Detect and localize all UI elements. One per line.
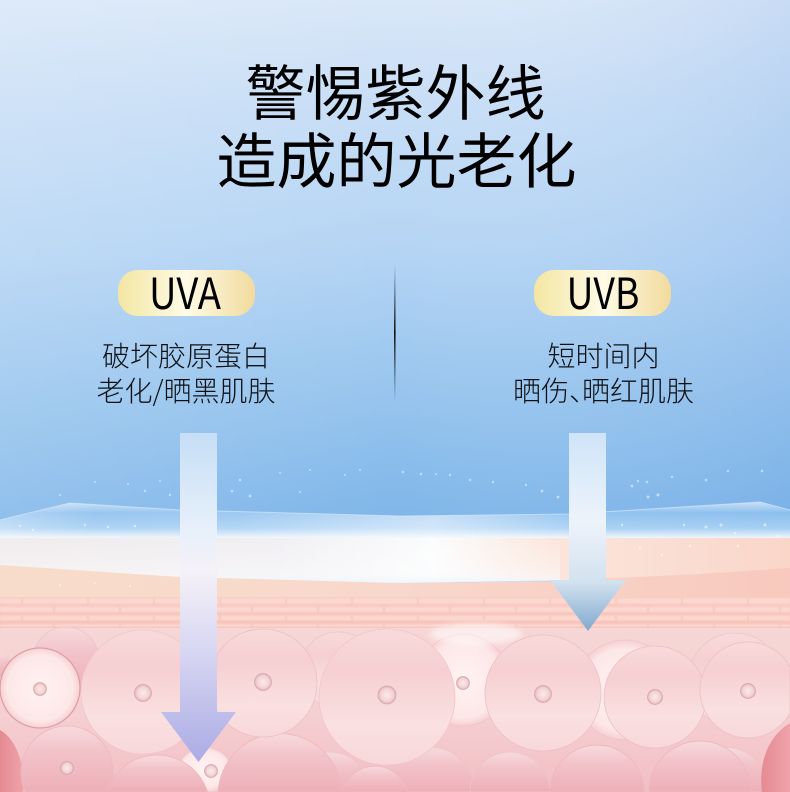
dark red cells at the edges [0,653,790,792]
pink base layer behind the cells [0,622,790,792]
arrow: UVA deep penetration [161,433,236,762]
UVB pill label [534,260,671,322]
UVA description: 破坏胶原蛋白 [102,335,270,375]
title: 造成的光老化 [216,114,576,201]
UVB description: 晒伤、晒红肌肤 [513,370,694,410]
title [216,46,576,201]
front row of skin cells with nuclei [0,629,790,778]
divider [394,264,396,402]
title: 警惕紫外线 [246,46,546,133]
UVB pill label: UVB [566,260,640,322]
skin layer: translucent blue film [0,502,790,538]
UVA pill label: UVA [149,260,221,322]
arrow: UVB shallow penetration [550,433,626,631]
sparkles in the sky [59,469,763,498]
skin layer: brick cells [0,590,790,628]
skin layer: white band [0,534,790,583]
UVB description: 短时间内 [547,335,660,375]
back row of skin cells [33,627,782,792]
UVA description: 老化/晒黑肌肤 [96,370,276,410]
UVA pill label [118,260,255,322]
panel: UVB [513,260,694,410]
sparkles on the film [19,524,779,587]
panel: UVA [96,260,276,410]
skin layer: peach band [0,562,790,597]
lower row of skin cells [21,726,751,792]
UVA description [96,335,276,410]
mist above cells [430,623,522,645]
UVB description [513,335,694,410]
